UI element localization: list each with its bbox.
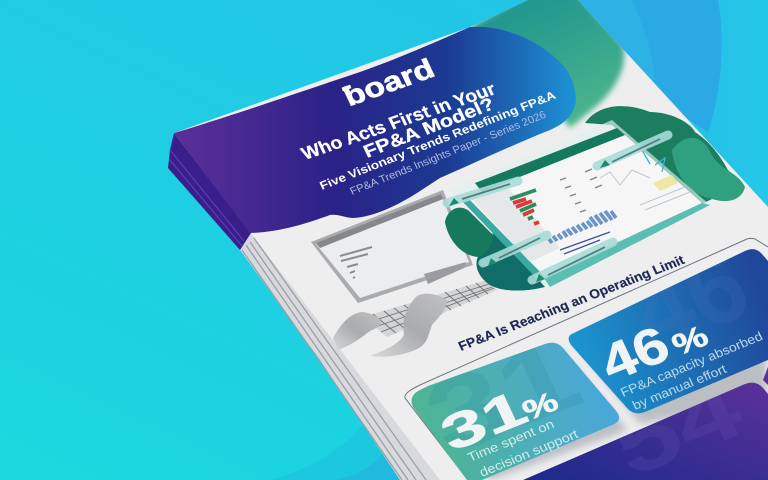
label: Time spent on bbox=[465, 416, 556, 465]
callouts bbox=[447, 135, 668, 282]
document stack edges bbox=[168, 133, 442, 480]
card: 46% bbox=[568, 249, 768, 414]
heading: FP&A Model? bbox=[360, 93, 497, 162]
section outline bbox=[405, 238, 768, 480]
label: by manual effort bbox=[630, 361, 729, 413]
monitor illustration bbox=[311, 190, 473, 303]
value bbox=[432, 380, 563, 462]
dashboard panel bbox=[450, 120, 710, 287]
keyboard illustration bbox=[363, 280, 497, 337]
green cloud behind dashboard bbox=[445, 106, 745, 291]
heading: Who Acts First in Your bbox=[298, 78, 499, 164]
infographic scene bbox=[168, 0, 768, 480]
hands illustration bbox=[333, 294, 447, 357]
value: 31 bbox=[432, 380, 536, 462]
label: decision support bbox=[477, 426, 581, 480]
card: 31% bbox=[412, 342, 620, 480]
header band bbox=[174, 27, 576, 233]
subheading: Five Visionary Trends Redefining FP&A bbox=[317, 88, 558, 193]
column chart: blue bbox=[549, 211, 616, 243]
label: FP&A capacity absorbed bbox=[618, 329, 765, 400]
background arcs bbox=[272, 0, 768, 480]
value: 46 bbox=[591, 315, 678, 392]
label bbox=[465, 416, 581, 480]
ghost number: 46 bbox=[612, 226, 766, 373]
value: % bbox=[667, 320, 713, 362]
section heading: FP&A Is Reaching an Operating Limit bbox=[456, 252, 687, 354]
value bbox=[591, 315, 713, 392]
green top blob bbox=[470, 0, 624, 128]
ghost number: 31 bbox=[408, 316, 597, 477]
value: % bbox=[517, 385, 563, 426]
card: purple bbox=[523, 382, 768, 480]
card shadows bbox=[420, 258, 768, 480]
bar chart: green and red bbox=[510, 190, 539, 224]
title block bbox=[298, 53, 558, 198]
logo: board bbox=[338, 53, 439, 112]
purple card corner bbox=[763, 367, 768, 385]
series line: FP&A Trends Insights Paper - Series 2026 bbox=[348, 109, 548, 198]
page bbox=[174, 0, 768, 480]
table and line chart hints bbox=[560, 150, 690, 254]
